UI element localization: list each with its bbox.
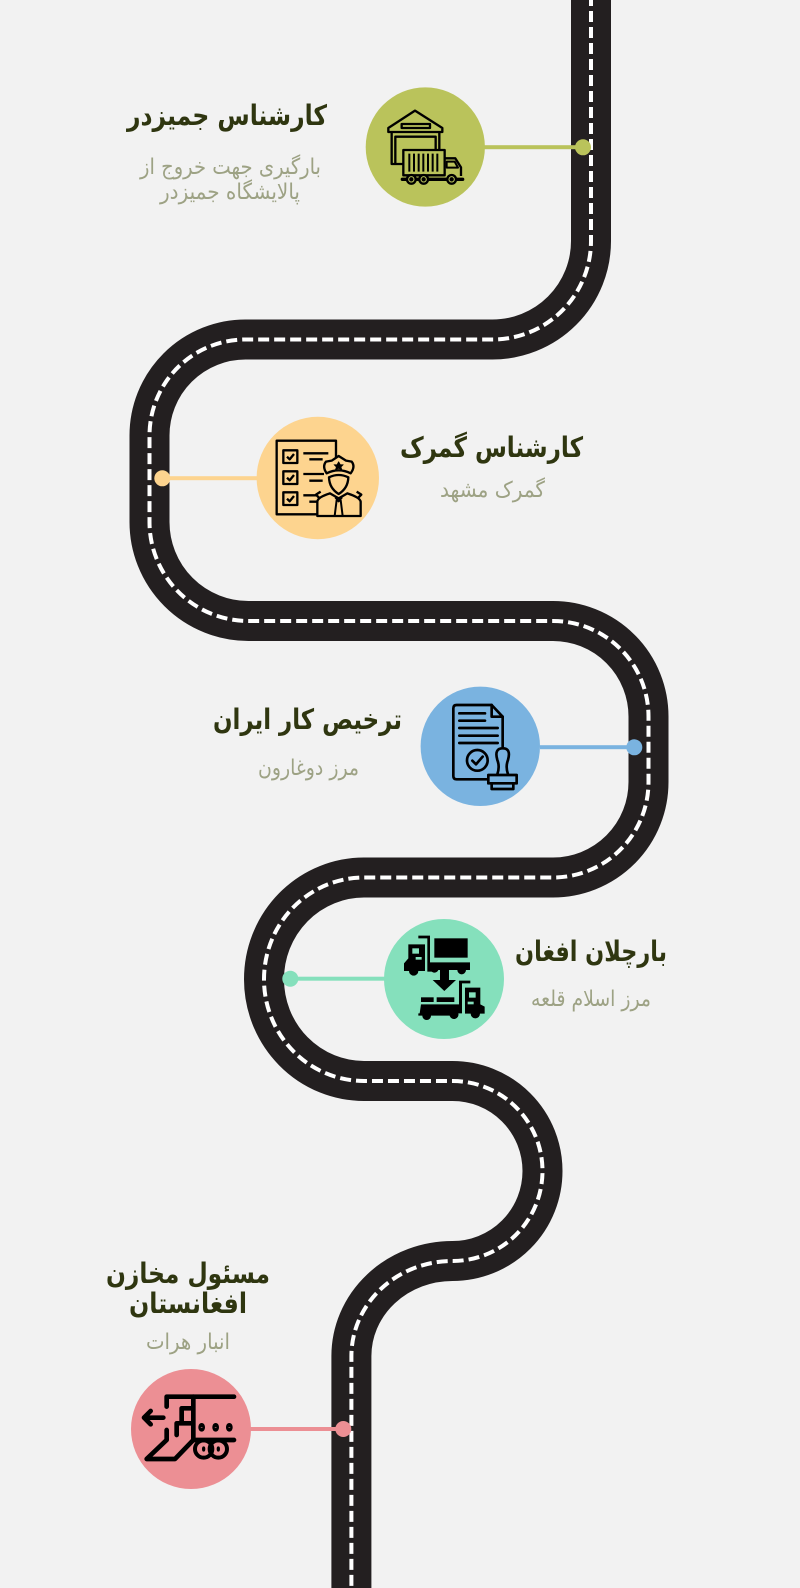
heading 3: ترخیص کار ایران — [213, 703, 402, 736]
icon: customs officer with checklist — [277, 441, 361, 516]
description 2: گمرک مشهد — [440, 477, 545, 503]
panel: step 2 customs expert — [154, 417, 584, 539]
winding road — [150, 0, 648, 1588]
icon: stamped document — [453, 705, 517, 789]
icon circle 2 — [257, 417, 379, 539]
icon circle 4 — [384, 919, 504, 1039]
icon circle 3 — [421, 687, 540, 806]
heading 2: کارشناس گمرک — [400, 431, 584, 464]
panel: step 3 Iran clearance — [213, 687, 642, 806]
connector 5 — [250, 1421, 351, 1437]
icon: cargo transfer between trucks — [404, 936, 485, 1020]
connector 3 — [540, 739, 642, 755]
heading 5: افغانستان — [129, 1287, 247, 1320]
description 5: انبار هرات — [146, 1330, 230, 1355]
panel: step 5 Afghanistan warehouse manager — [106, 1257, 351, 1489]
connector 1 — [480, 139, 591, 155]
description 1 — [139, 154, 321, 205]
description 4: مرز اسلام قلعه — [531, 987, 651, 1012]
connector 2 — [154, 470, 258, 486]
heading 5 — [106, 1257, 270, 1320]
description 3: مرز دوغارون — [258, 756, 359, 781]
description 1: بارگیری جهت خروج از — [139, 154, 321, 180]
heading 5: مسئول مخازن — [106, 1257, 270, 1290]
heading 1: کارشناس جمیزدر — [125, 99, 328, 132]
description 1: پالایشگاه جمیزدر — [159, 179, 300, 205]
connector 4 — [282, 971, 385, 987]
icon circle 1 — [366, 87, 485, 207]
panel: step 1 warehouse expert — [125, 87, 591, 207]
panel: step 4 Afghan cargo — [282, 919, 667, 1039]
icon circle 5 — [131, 1369, 251, 1489]
heading 4: بارچلان افغان — [515, 935, 667, 968]
icon: warehouse and truck — [388, 111, 463, 184]
icon: warehouse loading dock — [144, 1397, 234, 1459]
